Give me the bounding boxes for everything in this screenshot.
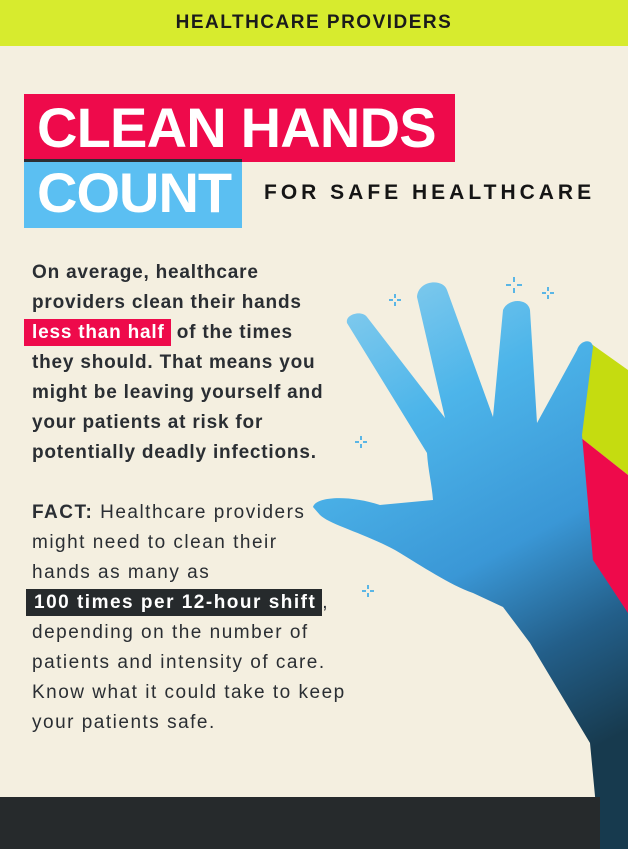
paragraph: fact: Know what it could take to keep	[32, 682, 346, 703]
paragraph: statistic: On average, healthcare	[32, 262, 259, 283]
bottom dark band	[0, 797, 600, 849]
paragraph: fact: depending on the number of	[32, 622, 309, 643]
hand	[313, 282, 628, 849]
paragraph: statistic: your patients at risk for	[32, 412, 263, 433]
paragraph: statistic: less than half of the times	[32, 322, 293, 343]
paragraph: statistic: might be leaving yourself and	[32, 382, 323, 403]
paragraph: fact: patients and intensity of care.	[32, 652, 326, 673]
paragraph: statistic: providers clean their hands	[32, 292, 302, 313]
top banner	[0, 0, 628, 46]
title	[24, 94, 455, 228]
paragraph: fact: FACT: Healthcare providers	[32, 502, 305, 523]
paragraph: statistic: potentially deadly infections.	[32, 442, 317, 463]
paragraph: fact	[26, 502, 346, 733]
stripes	[580, 343, 628, 625]
paragraph: fact: 100 times per 12-hour shift ,	[34, 592, 329, 613]
subtitle: FOR SAFE HEALTHCARE	[264, 181, 595, 204]
title: count: COUNT	[37, 161, 231, 224]
paragraph: fact: hands as many as	[32, 562, 210, 583]
paragraph: fact: might need to clean their	[32, 532, 278, 553]
sparkles	[355, 277, 554, 597]
top banner: HEALTHCARE PROVIDERS	[176, 12, 452, 33]
paragraph: statistic	[24, 262, 323, 463]
paragraph: fact: your patients safe.	[32, 712, 216, 733]
paragraph: statistic: they should. That means you	[32, 352, 315, 373]
title: clean hands: CLEAN HANDS	[37, 96, 436, 159]
